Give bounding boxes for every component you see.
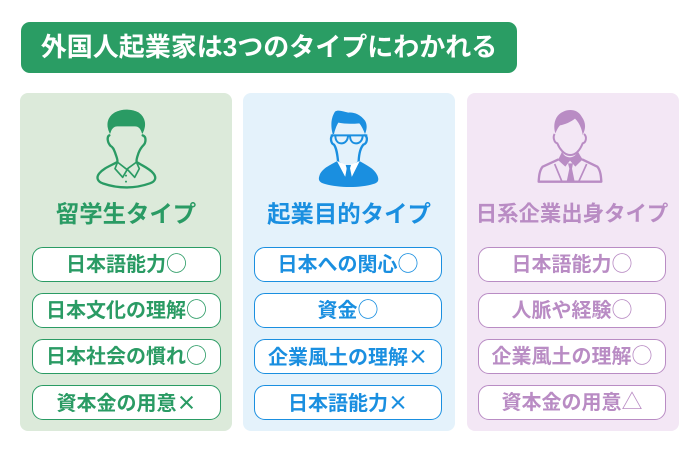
item [254, 385, 442, 420]
item: 人脈や経験○ [512, 294, 632, 324]
item: 資本金の用意△ [502, 386, 642, 416]
item: 資金○ [318, 294, 378, 324]
heading: 起業目的タイプ [267, 201, 431, 227]
panel: 留学生タイプ [20, 93, 232, 431]
item [32, 385, 221, 420]
item [254, 247, 442, 282]
title [21, 22, 517, 73]
heading: 日系企業出身タイプ [476, 202, 668, 226]
item: 企業風土の理解○ [492, 340, 652, 370]
item [478, 247, 666, 282]
title: 外国人起業家は3つのタイプにわかれる [41, 32, 497, 62]
item: 日本語能力× [288, 387, 408, 416]
icon: student [96, 110, 156, 189]
panel: 日系企業出身タイプ [467, 93, 679, 431]
item [254, 293, 442, 328]
item: 企業風土の理解× [268, 341, 428, 370]
heading: 留学生タイプ [56, 201, 196, 227]
item: 日本への関心○ [278, 248, 418, 278]
item [478, 293, 666, 328]
item: 資本金の用意× [56, 387, 196, 416]
item [32, 247, 221, 282]
item: 日本社会の慣れ○ [46, 340, 207, 370]
icon: entrepreneur [318, 110, 378, 187]
item [478, 385, 666, 420]
icon: businessperson [538, 110, 602, 183]
panel: 起業目的タイプ [243, 93, 455, 431]
item: 日本文化の理解○ [46, 294, 207, 324]
item: 日本語能力○ [66, 248, 187, 278]
item: 日本語能力○ [512, 248, 632, 278]
